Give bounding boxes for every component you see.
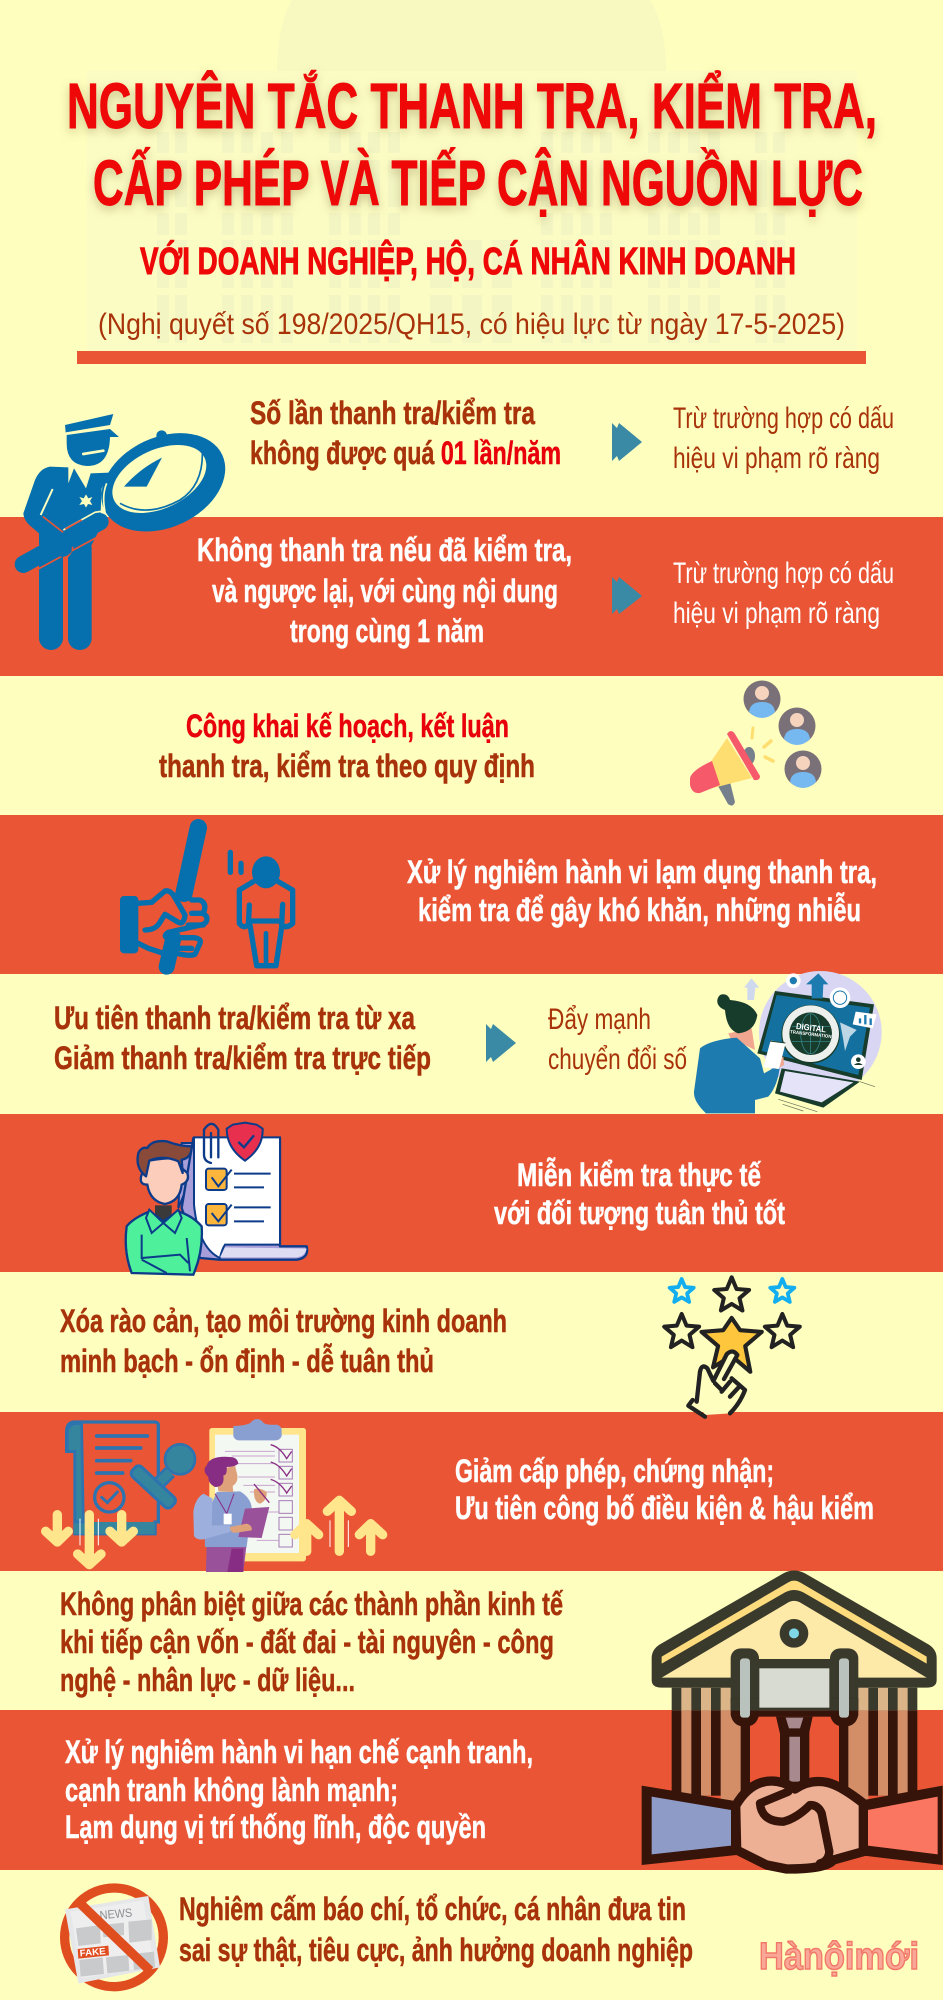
row 8 text	[455, 1453, 874, 1526]
icon: no fake news	[65, 1888, 163, 1987]
icon: digital transformation laptop: DIGITAL	[796, 1021, 827, 1035]
row 2 exception	[673, 557, 894, 630]
arrow row 5	[486, 1024, 516, 1062]
row 10 text	[65, 1734, 533, 1845]
row 2 text: Không thanh tra nếu đã kiểm tra,	[197, 532, 572, 568]
row 6 text	[494, 1157, 785, 1231]
row 10 text: Lạm dụng vị trí thống lĩnh, độc quyền	[65, 1809, 486, 1845]
icon: document and stamp	[67, 1422, 195, 1534]
row 6 text: Miễn kiểm tra thực tế	[517, 1157, 761, 1193]
icon: stars and hand	[664, 1277, 800, 1417]
row 3 text	[159, 708, 535, 784]
row 5 digital text: chuyển đổi số	[548, 1043, 687, 1076]
row 3 text: Công khai kế hoạch, kết luận	[186, 708, 509, 744]
row 9 text: Không phân biệt giữa các thành phần kinh tế	[60, 1586, 563, 1622]
row 9 text: nghệ - nhân lực - dữ liệu...	[60, 1662, 355, 1698]
title	[67, 69, 877, 219]
row 11 text: Nghiêm cấm báo chí, tổ chức, cá nhân đưa tin	[179, 1891, 686, 1927]
row 2 exception: hiệu vi phạm rõ ràng	[673, 597, 880, 630]
icon: digital transformation laptop: TRANSFORMATION	[790, 1029, 832, 1039]
row 3 text: thanh tra, kiểm tra theo quy định	[159, 748, 535, 784]
row 5 text: Giảm thanh tra/kiểm tra trực tiếp	[54, 1040, 431, 1076]
icon: up arrows	[295, 1500, 383, 1551]
row 7 text: minh bạch - ổn định - dễ tuân thủ	[60, 1343, 434, 1379]
row 1 exception	[673, 402, 894, 475]
row 11 text: sai sự thật, tiêu cực, ảnh hưởng doanh nghiệp	[179, 1932, 693, 1968]
row 9 text	[60, 1586, 563, 1698]
row 5 text	[54, 1000, 431, 1076]
row 5 digital text: Đẩy mạnh	[548, 1003, 651, 1036]
row 7 text	[60, 1303, 507, 1379]
row 2 text: và ngược lại, với cùng nội dung	[212, 573, 558, 609]
title underline bar	[77, 351, 866, 364]
icon: megaphone and audience	[690, 680, 822, 806]
row 10 text: cạnh tranh không lành mạnh;	[65, 1772, 398, 1808]
row 7 text: Xóa rào cản, tạo môi trường kinh doanh	[60, 1303, 507, 1339]
icon: clipboard with person	[193, 1419, 306, 1572]
logo: Hànộimới	[759, 1936, 919, 1978]
row 5 text: Ưu tiên thanh tra/kiểm tra từ xa	[54, 1000, 415, 1036]
icon: person with checklist	[126, 1123, 307, 1275]
row 1 exception: hiệu vi phạm rõ ràng	[673, 442, 880, 475]
legal reference: (Nghị quyết số 198/2025/QH15, có hiệu lực từ ngày 17-5-2025)	[98, 308, 845, 341]
icon: down arrows	[46, 1515, 133, 1565]
icon: no fake news: NEWS	[99, 1906, 133, 1922]
row 8 text: Giảm cấp phép, chứng nhận;	[455, 1453, 774, 1489]
row 11 text	[179, 1891, 693, 1968]
row 4 text	[407, 854, 877, 928]
row 2 text: trong cùng 1 năm	[290, 613, 484, 649]
band backgrounds	[0, 517, 943, 1870]
row 2 text	[197, 532, 572, 649]
row 1 text	[250, 395, 561, 471]
row 1 text: không được quá 01 lần/năm	[250, 435, 561, 471]
row 1 text: Số lần thanh tra/kiểm tra	[250, 395, 535, 431]
row 6 text: với đối tượng tuân thủ tốt	[494, 1195, 785, 1231]
icon: no fake news: FAKE	[79, 1946, 106, 1958]
icon: courthouse, gavel and handshake	[642, 1570, 943, 1869]
arrow row 2	[612, 577, 642, 614]
icon: baton hand and person	[120, 828, 293, 967]
row 9 text: khi tiếp cận vốn - đất đai - tài nguyên - công	[60, 1624, 554, 1660]
row 10 text: Xử lý nghiêm hành vi hạn chế cạnh tranh,	[65, 1734, 533, 1770]
arrow row 1	[612, 423, 642, 461]
icon: digital transformation laptop	[694, 971, 882, 1113]
row 5 digital text	[548, 1003, 687, 1076]
icon: inspector with magnifier	[23, 414, 241, 650]
